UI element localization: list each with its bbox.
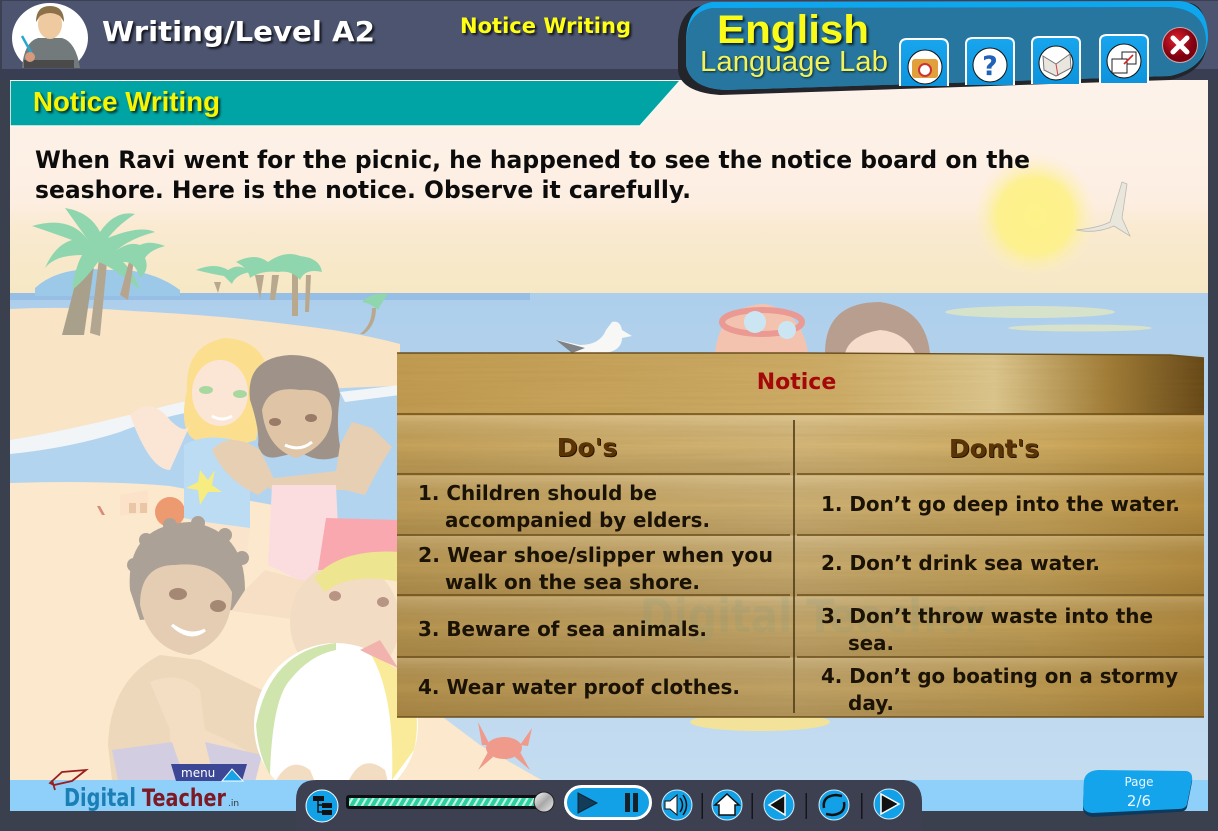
distant island [35,269,180,296]
header shadow band [0,69,1218,81]
child with brown hair [825,302,930,353]
menu tab: menu [181,766,215,780]
red hat child [290,518,397,656]
dont's list: 4. Don’t go boating on a stormy [821,664,1178,688]
sound button [662,790,692,820]
play pause pill [566,786,650,818]
refresh button [819,790,849,820]
board planks [397,353,1204,415]
divider [702,793,703,819]
panel body [686,1,1208,90]
header title: Writing/Level A2 [102,15,375,48]
Language Lab: Language Lab [700,46,888,78]
dont's list: day. [848,691,894,715]
header bar [2,1,1218,69]
crab [478,722,532,770]
English: English [717,8,869,52]
wave [10,386,397,442]
plank seams [397,353,1204,717]
banner title: Notice Writing [33,86,220,117]
player control bar [296,780,922,831]
tab: folder timer [900,39,948,86]
tab: help [966,38,1014,85]
bottom band [8,780,1208,811]
child with goggles [715,304,808,353]
do's list: 3. Beware of sea animals. [418,617,707,641]
wave foam [10,385,400,454]
intro paragraph: seashore. Here is the notice. Observe it carefully. [35,176,691,204]
avatar: writer [12,3,88,73]
sea [10,293,1208,783]
tab: window [1100,35,1148,83]
palm trees left [32,208,165,336]
header subtitle: Notice Writing [460,14,631,38]
sky [10,80,1208,300]
back button [764,790,794,820]
boat hint [690,718,830,731]
dark hair girl [212,355,392,620]
do's list: 2. Wear shoe/slipper when you [418,543,773,567]
sand castle and spade [97,503,147,515]
do's list: accompanied by elders. [445,508,710,532]
Digital Teacher logo: Teacher [142,784,226,812]
seagull flying [1076,182,1130,236]
divider [806,793,807,819]
English Language Lab panel [678,1,1208,95]
dont's list: 1. Don’t go deep into the water. [821,492,1180,516]
sea horizon sparkle [945,306,1152,332]
notice board [397,353,1204,717]
dont's heading: Dont's [949,434,1039,463]
section banner [10,81,680,126]
dont's list: 2. Don’t drink sea water. [821,551,1100,575]
blonde girl [130,338,265,530]
palm trees centre [196,254,388,334]
tab: help: ? [982,51,998,82]
notice heading: Notice [757,370,836,395]
progress bar [346,792,554,812]
do's list: walk on the sea shore. [445,570,700,594]
intro paragraph: When Ravi went for the picnic, he happened to see the notice board on the [35,146,1030,174]
seagull standing [556,322,632,353]
tab: book [1032,37,1080,84]
dont's list [821,492,1180,715]
watermark: Digital Teacher [640,589,985,643]
page indicator: 2/6 [1127,792,1151,810]
divider [752,793,753,819]
red beach ball small [155,497,185,527]
Digital Teacher logo [50,770,239,812]
next button [874,789,904,819]
lower beach sand [10,482,545,782]
menu tab [171,764,247,781]
Digital Teacher logo: Digital [64,783,136,812]
tree menu button [306,790,338,822]
dont's list: 3. Don’t throw waste into the [821,604,1153,628]
page indicator [1083,770,1192,817]
Digital Teacher logo: .in [228,799,239,809]
panel shadow [678,3,1207,95]
dont's list: sea. [848,631,894,655]
close button [1162,28,1198,62]
intro paragraph [35,146,1030,204]
do's heading: Do's [557,433,617,462]
boy with curly hair [108,516,275,782]
divider [861,793,862,819]
home button [712,790,742,820]
beach ball [254,640,418,780]
do's list: 1. Children should be [418,481,657,505]
page indicator: Page [1124,775,1154,789]
upper beach sand [10,308,400,445]
do's list: 4. Wear water proof clothes. [418,675,740,699]
do's list [418,481,773,699]
sun [978,158,1092,270]
